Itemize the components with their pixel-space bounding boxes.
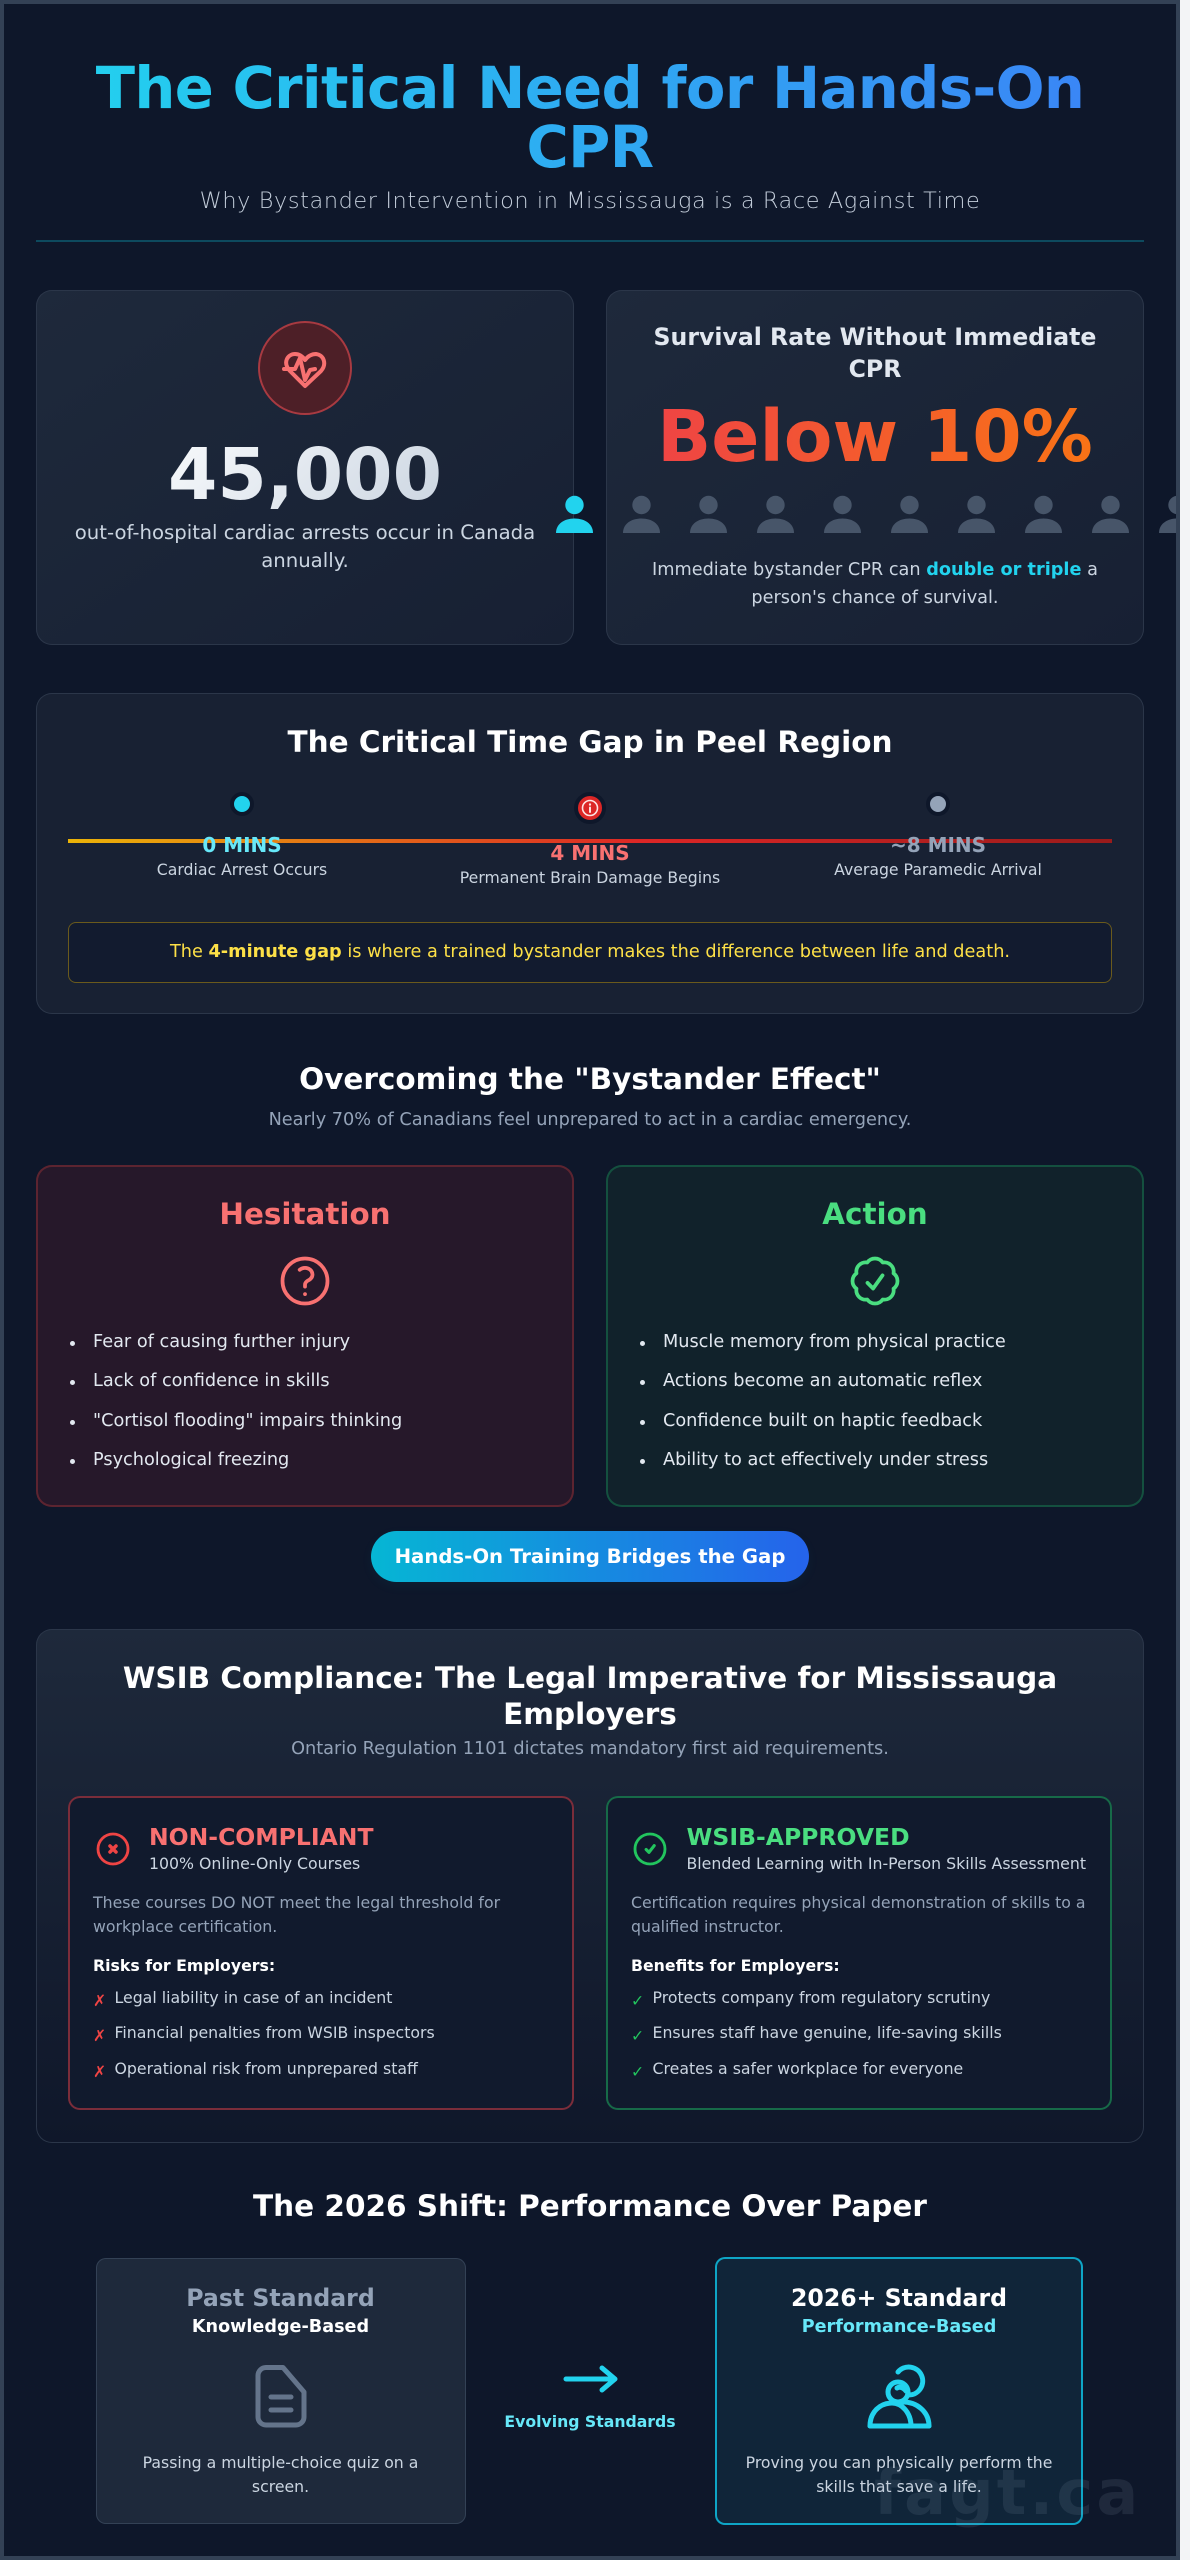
description bbox=[631, 1893, 1086, 1936]
heading: Overcoming the "Bystander Effect" bbox=[299, 1062, 881, 1096]
list: hesitation factors: "Cortisol flooding" impairs thinking bbox=[93, 1411, 402, 1431]
list: action factors: Actions become an automatic reflex bbox=[663, 1371, 982, 1391]
risk item: ✗ bbox=[93, 2026, 106, 2045]
heading: 2026 shift: The 2026 Shift: Performance Over Paper bbox=[253, 2189, 927, 2223]
description: Passing a multiple-choice quiz on a bbox=[143, 2453, 418, 2472]
icon: people skills bbox=[868, 2364, 932, 2428]
panel: critical time gap bbox=[36, 693, 1144, 1014]
heading: 2026+ Standard bbox=[791, 2284, 1007, 2312]
panel: survival rate bbox=[606, 290, 1144, 645]
survival note bbox=[652, 560, 1098, 608]
description: Certification requires physical demonstration of skills to a bbox=[631, 1893, 1086, 1912]
list: hesitation factors bbox=[70, 1332, 402, 1470]
heading: Past Standard bbox=[186, 2284, 375, 2312]
list: hesitation factors: Lack of confidence in skills bbox=[93, 1371, 330, 1391]
list: action factors: Ability to act effectively under stress bbox=[663, 1450, 988, 1470]
subheading: Knowledge-Based bbox=[192, 2317, 369, 2337]
icon: x circle bbox=[96, 1832, 130, 1866]
benefit item: Creates a safer workplace for everyone bbox=[652, 2059, 963, 2078]
heading: Hesitation bbox=[219, 1197, 391, 1231]
survival note: Immediate bystander CPR can double or triple a bbox=[652, 560, 1098, 580]
callout: 4-minute gap bbox=[68, 922, 1112, 983]
icon: badge check bbox=[850, 1256, 900, 1306]
description: workplace certification. bbox=[93, 1917, 277, 1936]
list: action factors bbox=[640, 1332, 1006, 1470]
timeline bar bbox=[68, 839, 1112, 843]
benefit item: Protects company from regulatory scrutiny bbox=[652, 1988, 990, 2007]
panel: wsib compliance bbox=[36, 1629, 1144, 2143]
list: action factors: Confidence built on haptic feedback bbox=[663, 1411, 982, 1431]
description bbox=[143, 2453, 418, 2496]
caption: 8 mins: Average Paramedic Arrival bbox=[834, 860, 1042, 879]
title: CPR bbox=[527, 114, 653, 181]
survival heading bbox=[654, 323, 1096, 383]
description bbox=[92, 1893, 500, 1936]
risk item: Legal liability in case of an incident bbox=[114, 1988, 392, 2007]
list: hesitation factors: Fear of causing further injury bbox=[93, 1332, 350, 1352]
risks heading: Risks for Employers: bbox=[93, 1956, 275, 1975]
caption: 0 mins: Cardiac Arrest Occurs bbox=[157, 860, 327, 879]
node: 0 mins bbox=[230, 792, 254, 816]
subheading: Ontario Regulation 1101 dictates mandatory first aid requirements. bbox=[291, 1739, 889, 1759]
callout: 4-minute gap: The 4-minute gap is where a trained bystander makes the difference between life and death. bbox=[170, 942, 1010, 962]
heading: Action bbox=[822, 1197, 928, 1231]
subtitle: Why Bystander Intervention in Mississauga is a Race Against Time bbox=[200, 188, 980, 214]
icon row: people bbox=[556, 496, 1176, 533]
survival heading: Survival Rate Without Immediate bbox=[654, 323, 1096, 351]
arrow: evolving standards bbox=[504, 2366, 676, 2431]
survival note: person's chance of survival. bbox=[751, 588, 999, 608]
heading: The Critical Time Gap in Peel Region bbox=[287, 725, 893, 759]
callout: bridge pill bbox=[371, 1531, 809, 1582]
heading: NON-COMPLIANT bbox=[149, 1823, 374, 1851]
stat description bbox=[75, 520, 535, 572]
description: skills that save a life. bbox=[816, 2477, 982, 2496]
subheading: Performance-Based bbox=[802, 2317, 996, 2337]
panel: action bbox=[606, 1165, 1144, 1507]
list: hesitation factors: Psychological freezing bbox=[93, 1450, 289, 1470]
heading: WSIB Compliance: The Legal Imperative for Mississauga bbox=[123, 1661, 1057, 1695]
node: 8 mins bbox=[926, 792, 950, 816]
panel: past standard bbox=[96, 2258, 466, 2524]
stat number: 45,000 bbox=[168, 433, 442, 516]
callout: bridge pill: Hands-On Training Bridges the Gap bbox=[395, 1545, 785, 1568]
label: Evolving Standards bbox=[504, 2412, 676, 2431]
benefits heading: Benefits for Employers: bbox=[631, 1956, 840, 1975]
watermark: fagt.ca bbox=[874, 2456, 1141, 2529]
subheading: 100% Online-Only Courses bbox=[149, 1854, 360, 1873]
risk item: ✗ bbox=[93, 1991, 106, 2010]
list: action factors: Muscle memory from physical practice bbox=[663, 1332, 1006, 1352]
label: 8 mins: ~8 MINS bbox=[890, 833, 986, 857]
label: 4 mins: 4 MINS bbox=[550, 841, 630, 865]
benefit item: ✓ bbox=[631, 1991, 644, 2010]
description bbox=[746, 2453, 1052, 2496]
title bbox=[36, 59, 1144, 177]
description: These courses DO NOT meet the legal threshold for bbox=[93, 1893, 500, 1912]
panel: hesitation bbox=[36, 1165, 574, 1507]
heading bbox=[123, 1661, 1057, 1731]
icon: heart pulse bbox=[258, 321, 352, 415]
icon: question mark bbox=[280, 1256, 330, 1306]
panel: wsib-approved bbox=[606, 1796, 1112, 2110]
header divider bbox=[36, 240, 1144, 242]
benefit item: Ensures staff have genuine, life-saving skills bbox=[652, 2023, 1002, 2042]
benefit item: ✓ bbox=[631, 2062, 644, 2081]
description: screen. bbox=[252, 2477, 309, 2496]
subheading: Blended Learning with In-Person Skills Assessment bbox=[686, 1854, 1086, 1873]
risk item: Operational risk from unprepared staff bbox=[114, 2059, 418, 2078]
panel: annual arrests stat bbox=[36, 290, 574, 645]
section heading: bystander effect bbox=[269, 1062, 911, 1130]
caption: 4 mins: Permanent Brain Damage Begins bbox=[460, 868, 720, 887]
label: 0 mins: 0 MINS bbox=[202, 833, 282, 857]
subheading: Nearly 70% of Canadians feel unprepared to act in a cardiac emergency. bbox=[269, 1110, 911, 1130]
survival figure: Below 10% bbox=[657, 395, 1093, 478]
title: The Critical Need for Hands-On bbox=[96, 55, 1084, 122]
risk item: ✗ bbox=[93, 2062, 106, 2081]
icon: check circle bbox=[634, 1832, 666, 1866]
panel: non-compliant bbox=[68, 1796, 574, 2110]
stat description: out-of-hospital cardiac arrests occur in Canada bbox=[75, 520, 535, 544]
header bbox=[36, 55, 1144, 242]
icon: document bbox=[256, 2365, 306, 2428]
survival heading: CPR bbox=[849, 355, 901, 383]
icon: arrow bbox=[564, 2366, 618, 2392]
risk item: Financial penalties from WSIB inspectors bbox=[114, 2023, 435, 2042]
heading: Employers bbox=[503, 1697, 677, 1731]
description: Proving you can physically perform the bbox=[746, 2453, 1052, 2472]
panel: 2026 standard bbox=[715, 2257, 1083, 2525]
node: 4 mins bbox=[574, 792, 606, 824]
stat description: annually. bbox=[261, 548, 349, 572]
heading: WSIB-APPROVED bbox=[686, 1823, 910, 1851]
description: qualified instructor. bbox=[631, 1917, 784, 1936]
benefit item: ✓ bbox=[631, 2026, 644, 2045]
